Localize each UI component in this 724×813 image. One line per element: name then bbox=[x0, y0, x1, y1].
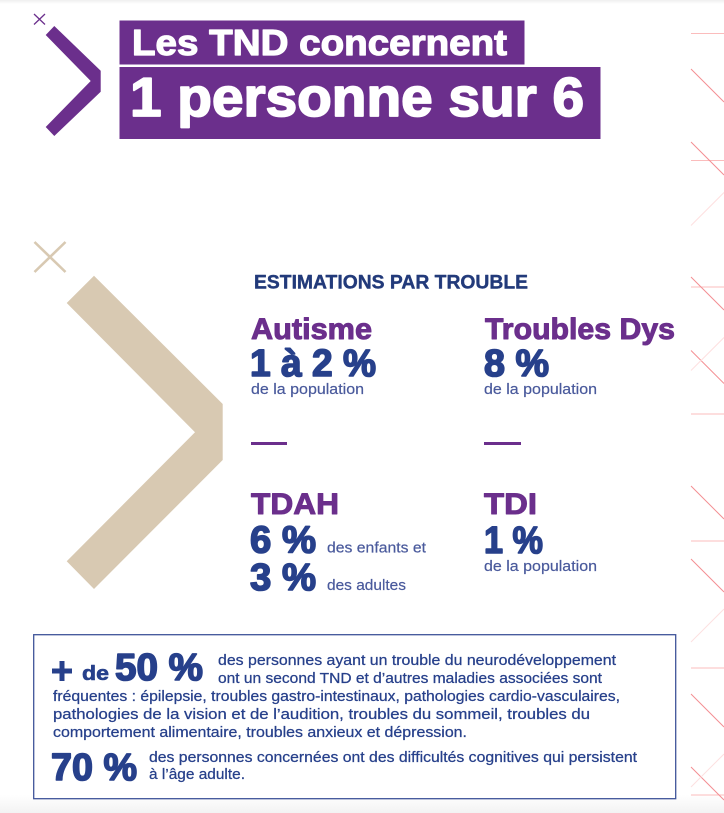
callout: plus de 50 %: 50 % bbox=[115, 647, 203, 689]
text block: comorbidities bbox=[53, 653, 620, 741]
stat: TDAH: des adultes bbox=[327, 578, 406, 594]
stat: Troubles Dys bbox=[484, 313, 675, 398]
icon: beige chevron bbox=[67, 276, 223, 589]
stat: Autisme bbox=[250, 313, 376, 398]
stat: TDAH: 6 % bbox=[250, 520, 316, 562]
stat: TDI: de la population bbox=[484, 559, 597, 575]
text block: persistent difficulties bbox=[149, 750, 637, 783]
text block: comorbidities: des personnes ayant un trouble du neurodéveloppement bbox=[218, 653, 616, 669]
stat: TDI: 1 % bbox=[484, 520, 543, 562]
stat: Troubles Dys: 8 % bbox=[484, 343, 549, 385]
text block: comorbidities: ont un second TND et d’autres maladies associées sont bbox=[218, 671, 602, 687]
stat: Troubles Dys: de la population bbox=[484, 382, 597, 398]
stat: TDI bbox=[484, 488, 597, 575]
icon: purple cross bbox=[34, 14, 45, 24]
text block: comorbidities: comportement alimentaire, troubles anxieux et dépression. bbox=[53, 725, 467, 741]
stat: Autisme: Autisme bbox=[251, 313, 372, 346]
stat: TDI: TDI bbox=[484, 488, 537, 521]
icon: beige cross bbox=[34, 242, 66, 272]
text block: comorbidities: fréquentes : épilepsie, troubles gastro-intestinaux, pathologies cardio-vasculaires, bbox=[53, 689, 620, 705]
stat: Troubles Dys: Troubles Dys bbox=[485, 313, 675, 346]
callout: 70 %: 70 % bbox=[51, 747, 137, 789]
stat: TDAH bbox=[250, 488, 426, 599]
text block: persistent difficulties: des personnes concernées ont des difficultés cognitives qui persistent bbox=[149, 750, 637, 766]
text block: persistent difficulties: à l’âge adulte. bbox=[149, 767, 245, 783]
callout: plus de 50 %: de bbox=[82, 663, 109, 685]
callout: plus de 50 % bbox=[52, 647, 203, 689]
stat: TDAH: des enfants et bbox=[327, 541, 426, 557]
title bbox=[120, 20, 600, 139]
panel: associated conditions bbox=[34, 635, 676, 799]
stat: TDAH: 3 % bbox=[250, 557, 316, 599]
title line 1: Les TND concernent bbox=[132, 22, 507, 63]
stat: Autisme: 1 à 2 % bbox=[250, 343, 376, 385]
text block: comorbidities: pathologies de la vision et de l’audition, troubles du sommeil, troubles du bbox=[53, 707, 590, 723]
stat: Autisme: de la population bbox=[251, 382, 364, 398]
icon: purple chevron bbox=[46, 26, 101, 136]
section heading: ESTIMATIONS PAR TROUBLE bbox=[254, 272, 528, 294]
title line 2: 1 personne sur 6 bbox=[130, 66, 584, 128]
stat: TDAH: TDAH bbox=[251, 488, 339, 521]
